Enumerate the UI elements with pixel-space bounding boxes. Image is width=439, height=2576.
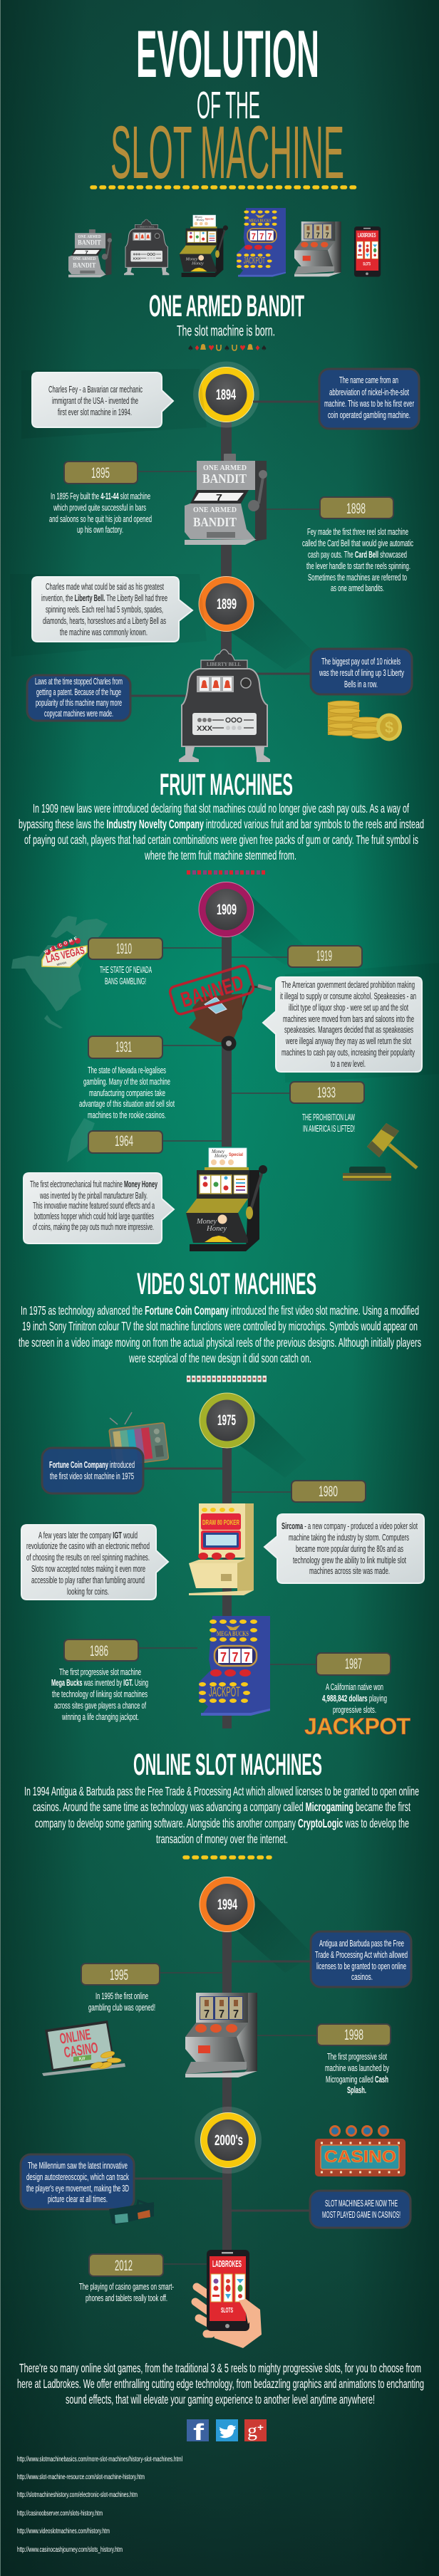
tag: 1980: [232, 1481, 366, 1502]
machine: money honey: Money: [196, 1218, 217, 1226]
machine: silver slot: [185, 1993, 257, 2077]
panel: 1986: 1986: [90, 1643, 108, 1659]
text: source links: http://www.slotmachinebasics.com/more-slot-machines/history-slot-machines.html: [17, 2456, 182, 2463]
panel: 1998: [257, 2024, 391, 2095]
callout: Charles Fey: Charles Fey - a Bavarian car mechanic: [48, 384, 143, 395]
symbol divider: cards and bells: [187, 344, 267, 353]
panel: 1919: [232, 946, 362, 967]
coin divider: [92, 185, 361, 189]
machine: draw poker: DRAW 80 POKER: [202, 1519, 239, 1527]
symbol divider: cards and bells: ♠: [261, 345, 267, 353]
machine: phone: [207, 2250, 249, 2331]
icon: google plus: g: [247, 2420, 257, 2441]
panel: 1895: and saloons so he quit his job and opened: [49, 513, 152, 524]
panel: 1986: winning a life changing jackpot.: [61, 1711, 139, 1722]
panel: 1931: The state of Nevada re-legalises: [88, 1065, 166, 1075]
panel: 1995: [81, 1964, 222, 2013]
panel: 1910: [88, 938, 222, 986]
callout: Money Honey: bottomless hopper which could hold large quantities: [34, 1211, 154, 1221]
callout: millennium: The Millennium saw the latest innovative: [28, 2160, 128, 2171]
callout: Antigua: casinos.: [351, 1971, 373, 1982]
icon: retro television: [109, 1412, 169, 1466]
panel: 1987: 4,988,842 dollars playing: [322, 1693, 387, 1704]
callout: Money Honey: of coins, making the pay outs much more impressive.: [33, 1221, 154, 1232]
callout: millennium: design autostereoscopic, which can track: [26, 2171, 129, 2182]
callout: Money Honey: This innovative machine featured sound effects and a: [33, 1200, 155, 1211]
callout: Charles Fey: immigrant of the USA - invented the: [52, 395, 138, 406]
panel: 1910: BANS GAMBLING!: [105, 976, 146, 986]
panel: 1933: [232, 1082, 364, 1134]
machine: mega bucks: JACKPOT: [209, 1685, 240, 1700]
machine: phone: LADBROKES: [212, 2258, 242, 2269]
callout: patent laws: popularity of this machine many more: [36, 697, 122, 708]
icon: 3D glasses: [109, 2201, 154, 2225]
illustration: banned machine on trolley: [169, 964, 272, 1051]
text: source links: [17, 2456, 182, 2554]
year marker: 1899: 1899: [217, 596, 237, 612]
card divider: [187, 1376, 267, 1382]
callout: IGT: revolutionize the casino with an electronic method: [26, 1540, 150, 1551]
text: closing paragraph: [17, 2361, 424, 2406]
symbol divider: cards and bells: ♠: [224, 345, 230, 353]
year marker: 1975: [200, 1393, 306, 1478]
callout: Charles Fey: first ever slot machine in 1994.: [58, 407, 132, 417]
icon: laptop online casino: PLAY: [79, 2057, 86, 2062]
year marker: 2000's: [195, 2107, 262, 2174]
year marker: 1909: [199, 882, 306, 965]
panel: 1895: which proved quite successful in bars: [53, 502, 146, 513]
machine: mega bucks: 7: [232, 1650, 238, 1664]
symbol divider: cards and bells: ♦: [194, 345, 200, 353]
panel: 1910: 1910: [116, 941, 132, 957]
panel: 1898: 1898: [346, 501, 366, 517]
machine: silver slot: 7: [233, 2008, 239, 2020]
machine row: one armed bandit: [68, 229, 112, 277]
panel: 1995: gambling club was opened!: [88, 2002, 155, 2013]
callout: Charles Fey: [21, 369, 207, 439]
panel: 2012: phones and tablets really took off.: [86, 2293, 167, 2303]
panel: 2012: The playing of casino games on smart-: [79, 2281, 174, 2292]
icon: las vegas sign: WELCOME: [43, 937, 78, 955]
panel: 1919: 1919: [316, 948, 332, 964]
title: OF THE: [197, 84, 260, 127]
symbol divider: cards and bells: ♦: [254, 345, 261, 353]
text art: jackpot: JACKPOT: [304, 1714, 410, 1739]
coin divider: [185, 1855, 270, 1860]
panel: 1931: manufacturing companies take: [89, 1088, 165, 1098]
panel: 1998: The first progressive slot: [327, 2051, 387, 2062]
machine: mega bucks: 7: [244, 1650, 250, 1664]
text: source links: http://www.videoslotmachines.com/history.htm: [17, 2528, 110, 2535]
callout: Fortune Coin Company: [42, 1448, 222, 1493]
panel: 1998: 1998: [344, 2027, 363, 2043]
machine: liberty bell: LIBERTY BELL: [207, 662, 241, 667]
machine: one armed bandit: [185, 454, 267, 545]
panel: 1933: THE PROHIBITION LAW: [302, 1112, 355, 1122]
callout: IGT: Slots now accepted notes making it even more: [31, 1563, 145, 1574]
timeline spine: fruit machines: [222, 909, 232, 1147]
panel: 1986: The first progressive slot machine: [59, 1667, 141, 1677]
callout: Liberty Bell: diamonds, hearts, horseshoes and a Liberty Bell as: [43, 615, 166, 626]
machine row: phone: [354, 226, 381, 277]
icon: laptop online casino: CASINO: [63, 2040, 99, 2061]
panel: 1986: the technology of linking slot machines: [52, 1689, 148, 1699]
panel: 2012: 2012: [115, 2258, 133, 2274]
callout: Liberty Bell: [10, 574, 207, 657]
icon: facebook: f: [193, 2419, 204, 2445]
callout: Money Honey: The first electromechanical fruit machine Money Honey: [30, 1179, 157, 1189]
callout: IGT: accessible to play rather than fumbling around: [31, 1575, 145, 1585]
panel: 1986: [51, 1639, 197, 1722]
illustration: hand holding phone: [195, 2250, 262, 2348]
text: online slots intro: transaction of money over the internet.: [156, 1832, 288, 1846]
callout: prohibition: to a new level.: [331, 1058, 366, 1069]
panel: 1910: THE STATE OF NEVADA: [100, 964, 152, 975]
panel: 2012: [79, 2254, 207, 2303]
icon: twitter: [216, 2419, 238, 2441]
callout: name origin: The name came from an: [339, 375, 398, 385]
callout: biggest pay out: Bells in a row.: [344, 679, 378, 689]
machine: money honey: Special: [229, 1153, 243, 1157]
callout: Antigua: [232, 1931, 411, 1987]
panel: 1987: A Californian native won: [326, 1681, 383, 1692]
symbol divider: cards and bells: ♠: [187, 345, 194, 353]
text: source links: http://www.slot-machine-resource.com/slot-machine-history.htm: [17, 2473, 145, 2481]
symbol divider: cards and bells: ♥: [239, 345, 246, 353]
text: source links: http://casinoobserver.com/slots-history.htm: [17, 2510, 103, 2518]
callout: name origin: [253, 369, 419, 429]
machine: one armed bandit: 7: [216, 492, 222, 503]
panel: 1987: progressive slots.: [333, 1704, 376, 1715]
text: video slot intro: were sceptical of the new design it did soon catch on.: [128, 1351, 311, 1365]
machine: liberty bell: [179, 650, 270, 762]
icon: laptop online casino: ONLINE: [58, 2026, 92, 2048]
machine: one armed bandit: ONE ARMED: [203, 464, 247, 472]
fruit divider: [187, 870, 267, 875]
panel: 1986: Mega Bucks was invented by IGT. Using: [51, 1677, 148, 1688]
callout: most played game: [232, 2191, 410, 2228]
callout: Money Honey: [24, 1173, 174, 1243]
panel: 1987: [257, 1653, 391, 1715]
panel: 1995: 1995: [110, 1967, 128, 1983]
callout: patent laws: getting a patent. Because of the huge: [36, 687, 121, 697]
year marker: 1994: [200, 1877, 314, 1973]
machine: one armed bandit: BANDIT: [193, 515, 237, 529]
panel: 1964: 1964: [115, 1133, 133, 1149]
icon: coin stacks: [328, 701, 402, 741]
year marker: 2000's: 2000's: [215, 2132, 243, 2149]
illustration: banned machine on trolley: BANNED: [178, 971, 247, 1012]
text: fruit machines intro: [19, 801, 424, 862]
machine row: money honey: [180, 215, 228, 277]
panel: 1933: IN AMERICA IS LIFTED!: [303, 1123, 355, 1134]
year marker: 1899: [199, 577, 314, 669]
icon: gavel: [343, 1123, 417, 1181]
machine: phone: SLOTS: [221, 2307, 233, 2315]
year marker: 1909: 1909: [217, 902, 237, 918]
panel: 1931: [79, 1036, 222, 1120]
panel: 1895: In 1895 Fey built the 4-11-44 slot machine: [51, 491, 150, 501]
machine: mega bucks: [199, 1616, 270, 1716]
machine row: mega bucks: [237, 208, 286, 277]
panel: 1933: 1933: [317, 1085, 336, 1101]
panel: 1998: Microgaming called Cash: [326, 2074, 388, 2085]
text: online slots intro: [24, 1784, 419, 1846]
machine: mega bucks: 7: [220, 1650, 227, 1664]
text: video slot intro: [19, 1303, 421, 1365]
callout: patent laws: copycat machines were made.: [44, 708, 113, 719]
text: fruit machines intro: where the term fruit machine stemmed from.: [144, 848, 296, 862]
machine: one armed bandit: BANDIT: [202, 471, 247, 486]
machine: silver slot: 7: [204, 2008, 210, 2020]
panel: 1986: across sites gave players a chance of: [54, 1700, 146, 1711]
heading: fruit machines: FRUIT MACHINES: [160, 768, 293, 802]
year marker: 1894: 1894: [216, 387, 236, 403]
icon: casino sign: [315, 2127, 406, 2176]
machine: money honey: [186, 1148, 267, 1251]
machine: money honey: Honey: [214, 1153, 228, 1159]
title: [110, 16, 344, 194]
callout: Liberty Bell: invention, the Liberty Bell. The Liberty Bell had three: [41, 593, 167, 603]
machine: silver slot: 7: [219, 2008, 224, 2020]
callout: IGT: of choosing the results on reel spinning machines.: [26, 1552, 150, 1563]
icon: coin stacks: $: [385, 719, 393, 736]
tag: 1980: 1980: [319, 1483, 338, 1500]
callout: patent laws: [27, 675, 187, 721]
callout: IGT: [21, 1525, 168, 1600]
year marker: 1994: 1994: [217, 1897, 237, 1913]
machine: money honey: Honey: [206, 1225, 227, 1233]
callout: millennium: [21, 2154, 222, 2209]
panel: 1895: [49, 462, 197, 535]
machine: draw poker: [189, 1503, 254, 1595]
year marker: 1975: 1975: [217, 1412, 236, 1429]
panel: 1995: In 1995 the first online: [95, 1991, 148, 2001]
callout: Fortune Coin Company: the first video slot machine in 1975: [50, 1471, 134, 1481]
icon: las vegas sign: LAS VEGAS: [45, 944, 86, 966]
icon: facebook: [187, 2419, 209, 2445]
symbol divider: cards and bells: ♥: [208, 345, 215, 353]
timeline spine: online slots: [222, 1904, 232, 2258]
icon: las vegas sign: [42, 937, 87, 967]
panel: 1987: 1987: [345, 1656, 362, 1672]
icon: las vegas sign: NEVADA: [56, 961, 67, 966]
year marker: 1894: [193, 362, 259, 427]
callout: patent laws: Laws at the time stopped Charles from: [35, 676, 123, 687]
callout: millennium: the player's eye movement, making the 3D: [26, 2183, 129, 2194]
callout: IGT: A few years later the company IGT would: [38, 1530, 138, 1540]
panel: 1931: 1931: [115, 1039, 132, 1055]
callout: Sircoma: [264, 1514, 424, 1583]
icon: casino sign: CASINO: [324, 2147, 396, 2166]
timeline spine: one armed bandit: [221, 395, 232, 679]
machine row: liberty bell: [124, 219, 169, 275]
panel: 1931: advantage of this situation and sell slot: [79, 1098, 175, 1109]
icon: google plus: +: [257, 2421, 264, 2433]
icon: laptop online casino: [42, 2020, 125, 2076]
panel: 1931: machines to the rookie casinos.: [88, 1110, 166, 1120]
panel: 1898: [267, 497, 413, 593]
machine row: silver slot: [294, 221, 341, 276]
icon: google plus: [244, 2419, 267, 2441]
panel: 1964: [67, 1118, 222, 1162]
callout: millennium: picture clear at all times.: [48, 2194, 108, 2204]
callout: prohibition: [263, 963, 439, 1083]
panel: 1931: gambling. Many of the slot machine: [83, 1076, 170, 1087]
machine: mega bucks: MEGA BUCKS: [217, 1630, 249, 1637]
map: north america: [11, 916, 108, 1028]
callout: biggest pay out: [257, 649, 412, 694]
callout: Liberty Bell: spinning reels. Each reel had 5 symbols, spades,: [46, 604, 163, 615]
callout: IGT: looking for coins.: [67, 1586, 109, 1597]
panel: 1895: 1895: [91, 465, 110, 481]
machine: liberty bell: XXX: [197, 725, 212, 733]
timeline spine: video slots: [222, 1420, 232, 1728]
panel: 1898: cash pay outs. The Card Bell showcased: [308, 549, 407, 560]
subheading: The slot machine is born.: [177, 323, 275, 339]
machine: money honey: Money: [211, 1149, 225, 1154]
callout: Liberty Bell: the machine was commonly known.: [60, 627, 148, 637]
panel: 1898: as one armed bandits.: [331, 583, 384, 593]
panel: 1998: machine was launched by: [325, 2063, 389, 2073]
text: source links: http://slotmachineshistory.com/electronic-slot-machines.htm: [17, 2491, 138, 2499]
text: source links: http://www.casinocashjourney.com/slots_history.htm: [17, 2546, 123, 2554]
callout: Fortune Coin Company: Fortune Coin Company introduced: [49, 1459, 135, 1470]
machine: one armed bandit: ONE ARMED: [193, 506, 237, 514]
panel: 1998: Splash.: [347, 2085, 366, 2095]
callout: Money Honey: was invented by the pinball manufacturer Bally.: [39, 1190, 148, 1201]
callout: Liberty Bell: Charles made what could be said as his greatest: [46, 581, 164, 592]
panel: 1895: up his own factory.: [77, 524, 123, 535]
